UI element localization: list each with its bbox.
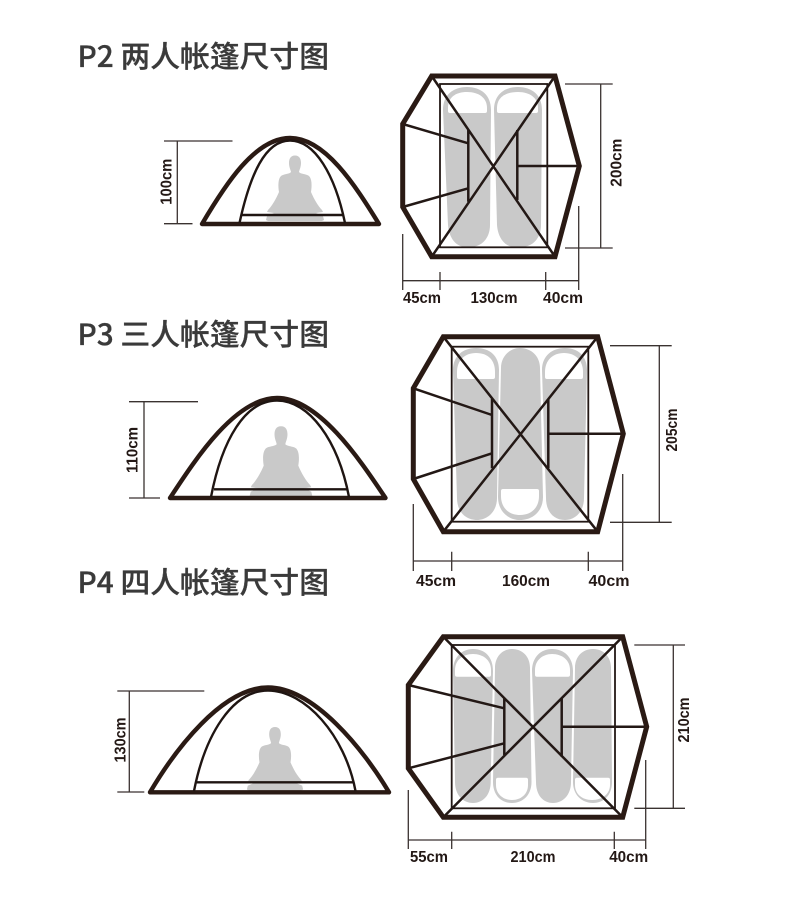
- label: 100cm: 100cm: [158, 159, 176, 205]
- width dimension: [413, 474, 623, 571]
- height dimension: [129, 402, 198, 498]
- inner rectangle: [440, 84, 547, 247]
- depth dimension: [610, 346, 672, 522]
- outer footprint: [413, 337, 623, 532]
- diagonal poles: [432, 76, 555, 257]
- height dimension: [117, 691, 204, 792]
- label: 205cm: 205cm: [664, 408, 681, 452]
- section: P4 four-person tent: [78, 560, 693, 866]
- heading: P4: P4 四人帐篷尺寸图: [78, 560, 329, 602]
- floor plan: P2 tent: [403, 76, 626, 307]
- label: 40cm: 40cm: [588, 573, 630, 590]
- width dimension: [403, 206, 579, 290]
- side view: P4 tent: [113, 688, 389, 792]
- tent outer arc: [202, 138, 379, 224]
- tent inner arc: [240, 140, 345, 223]
- height dimension: [164, 141, 232, 224]
- tent inner arc: [211, 400, 349, 497]
- label: 200cm: 200cm: [609, 139, 626, 187]
- label: 45cm: 45cm: [416, 573, 456, 590]
- vestibule struts: [413, 388, 623, 479]
- floor line: [195, 781, 354, 783]
- side view: P3 tent: [124, 398, 386, 498]
- figure: seated person: [250, 426, 312, 497]
- label: 40cm: 40cm: [543, 290, 583, 307]
- vestibule struts: [408, 685, 647, 768]
- depth dimension: [634, 645, 685, 808]
- label: 130cm: 130cm: [470, 290, 518, 307]
- label: 45cm: 45cm: [403, 290, 441, 307]
- figure: seated person: [247, 727, 303, 790]
- section: P3 three-person tent: [78, 312, 681, 590]
- tent inner arc: [194, 690, 356, 791]
- diagonal poles: [443, 637, 623, 817]
- heading: P3: P3 三人帐篷尺寸图: [78, 312, 329, 354]
- diagonal poles: [443, 337, 598, 532]
- figure: seated person: [266, 156, 324, 221]
- sleeping bags: [453, 348, 587, 520]
- label: 210cm: 210cm: [510, 849, 556, 866]
- width dimension: [408, 760, 646, 849]
- label: 160cm: 160cm: [502, 573, 550, 590]
- heading: P2: P2 两人帐篷尺寸图: [78, 34, 329, 76]
- tent outer arc: [150, 688, 389, 792]
- label: 40cm: 40cm: [609, 849, 648, 866]
- vestibule struts: [403, 124, 579, 207]
- tent outer arc: [170, 398, 386, 498]
- section: P2 two-person tent: [78, 34, 626, 307]
- floor line: [240, 214, 344, 216]
- label: 210cm: 210cm: [676, 698, 693, 742]
- floor plan: P4 tent: [408, 637, 693, 866]
- sleeping bags: [443, 87, 542, 247]
- inner rectangle: [452, 347, 588, 522]
- label: 55cm: 55cm: [410, 849, 448, 866]
- outer footprint: [408, 637, 647, 817]
- side view: P2 tent: [158, 138, 379, 224]
- floor plan: P3 tent: [413, 337, 681, 590]
- label: 130cm: 130cm: [113, 718, 130, 762]
- outer footprint: [403, 76, 579, 257]
- label: 110cm: 110cm: [124, 427, 141, 473]
- floor line: [214, 488, 347, 490]
- depth dimension: [565, 84, 613, 248]
- inner rectangle: [452, 645, 615, 808]
- sleeping bags: [453, 649, 612, 803]
